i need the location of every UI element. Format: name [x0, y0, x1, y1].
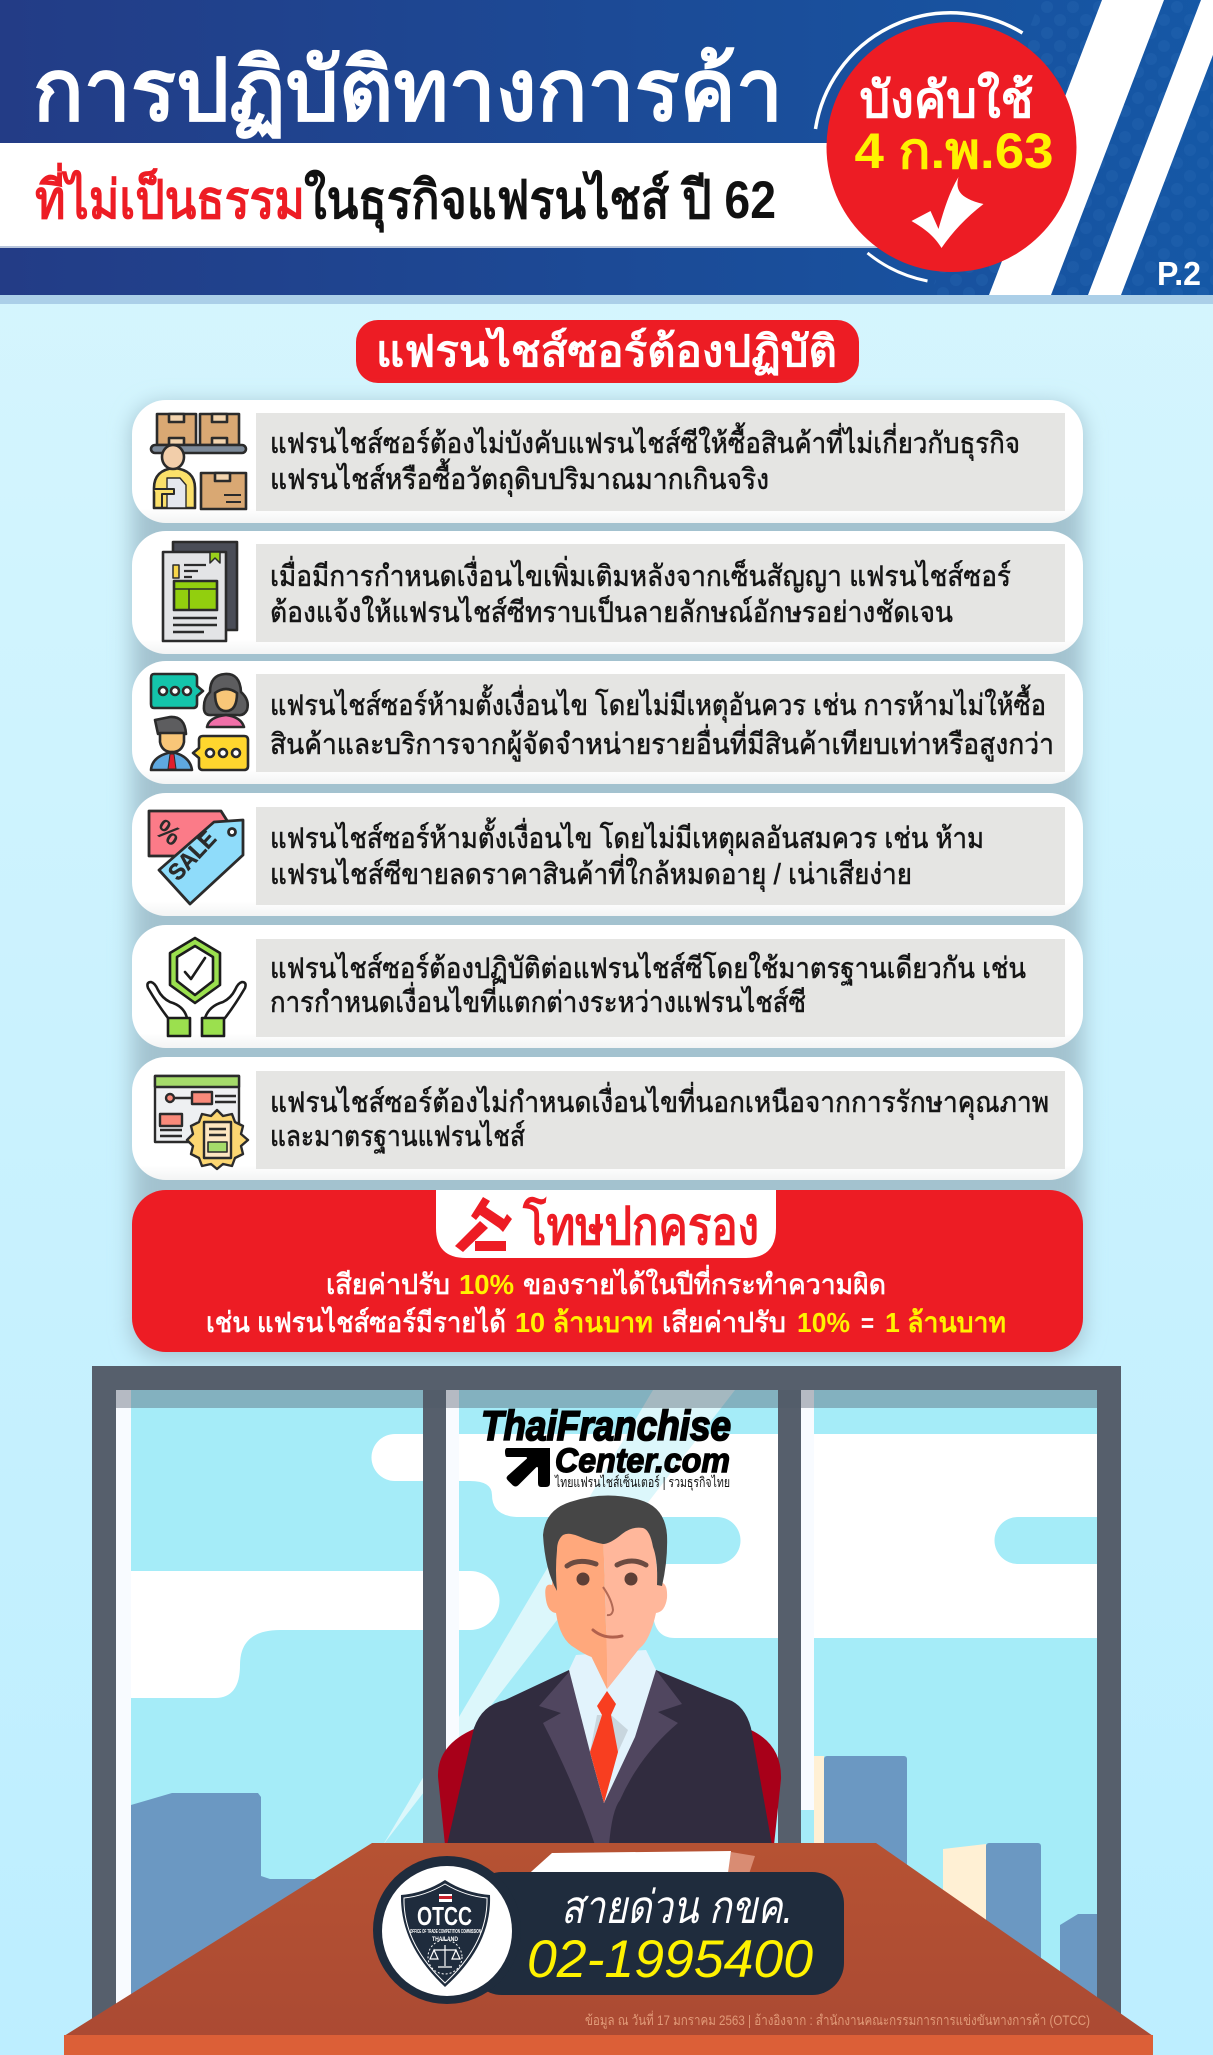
text: rule 6: และมาตรฐานแฟรนไชส์	[270, 1119, 525, 1154]
text: rule 1: แฟรนไชส์หรือซื้อวัตถุดิบปริมาณมากเกินจริง	[270, 458, 769, 497]
penalty line 2: =	[861, 1307, 874, 1338]
panel: rule 2	[132, 531, 1083, 654]
icon: warehouse worker	[151, 414, 246, 509]
lapels	[539, 1670, 682, 1845]
suit	[447, 1670, 772, 1845]
penalty line 2	[206, 1307, 1006, 1338]
penalty line 2: 1 ล้านบาท	[885, 1307, 1006, 1338]
text: rule 3: แฟรนไชส์ซอร์ห้ามตั้งเงื่อนไข โดยไม่มีเหตุอันควร เช่น การห้ามไม่ให้ซื้อ	[270, 684, 1046, 723]
badge: effective date: บังคับใช้	[860, 71, 1034, 128]
icon: check mark	[912, 177, 984, 248]
icon: gavel	[455, 1197, 512, 1252]
buildings	[131, 1756, 1097, 1997]
penalty heading: โทษปกครอง	[522, 1195, 759, 1256]
icon: logo arrow	[504, 1447, 551, 1488]
logo: ThaiFranchise Center: Center.com	[555, 1442, 730, 1480]
hotline label: สายด่วน กขค.	[561, 1881, 793, 1933]
panel: administrative penalty	[132, 1190, 1083, 1352]
reflection	[383, 1390, 735, 1845]
panel: rule 5	[132, 925, 1083, 1048]
logo: OTCC shield: THAILAND	[432, 1936, 458, 1943]
shirt and tie	[569, 1650, 656, 1803]
hotline badge	[373, 1856, 844, 2004]
logo: OTCC shield: OFFICE OF TRADE COMPETITION COMMISSION	[410, 1929, 481, 1935]
text: rule 4	[270, 817, 984, 892]
penalty line 2: 10%	[797, 1307, 850, 1338]
text: rule 2	[270, 556, 1011, 629]
text: rule 3: สินค้าและบริการจากผู้จัดจำหน่ายรายอื่นที่มีสินค้าเทียบเท่าหรือสูงกว่า	[270, 724, 1054, 762]
subtitle strip	[0, 143, 880, 248]
penalty line 1: ของรายได้ในปีที่กระทำความผิด	[523, 1265, 886, 1300]
penalty line 2: 10 ล้านบาท	[515, 1307, 653, 1338]
window frame	[92, 1366, 1121, 2036]
text: rule 6: แฟรนไชส์ซอร์ต้องไม่กำหนดเงื่อนไขที่นอกเหนือจากการรักษาคุณภาพ	[270, 1082, 1049, 1120]
illustration: businessman	[438, 1495, 781, 1845]
text: rule 2: เมื่อมีการกำหนดเงื่อนไขเพิ่มเติมหลังจากเซ็นสัญญา แฟรนไชส์ซอร์	[270, 556, 1011, 593]
panel: rule 6	[132, 1057, 1083, 1180]
badge: effective date: 4 ก.พ.63	[854, 123, 1054, 179]
panel: rule 3	[132, 661, 1083, 784]
icon: sale tags: %	[150, 813, 187, 852]
text: rule 4: แฟรนไชส์ซีขายลดราคาสินค้าที่ใกล้หมดอายุ / เน่าเสียง่าย	[270, 854, 912, 892]
text: rule 6	[270, 1082, 1049, 1154]
text: rule 5	[270, 951, 1026, 1019]
text: rule 5: การกำหนดเงื่อนไขที่แตกต่างระหว่างแฟรนไชส์ซี	[270, 982, 806, 1019]
paper on table	[725, 1852, 755, 1880]
section heading pill: แฟรนไชส์ซอร์ต้องปฏิบัติ	[376, 326, 837, 376]
penalty line 2: เสียค่าปรับ	[662, 1307, 786, 1338]
source note: ข้อมูล ณ วันที่ 17 มกราคม 2563 | อ้างอิงจาก : สำนักงานคณะกรรมการการแข่งขันทางการค้า (OTCC)	[585, 2011, 1090, 2029]
icon: people talking	[151, 674, 248, 770]
header banner	[0, 0, 1213, 295]
icon: contract document	[163, 542, 237, 641]
clouds	[131, 1434, 1097, 1698]
section heading pill	[356, 320, 859, 383]
penalty line 1	[326, 1265, 886, 1300]
text: rule 4: แฟรนไชส์ซอร์ห้ามตั้งเงื่อนไข โดยไม่มีเหตุผลอันสมควร เช่น ห้าม	[270, 817, 984, 856]
panel: rule 1	[132, 400, 1083, 523]
icon: quality standard	[155, 1076, 248, 1169]
icon: shield in hands	[147, 938, 246, 1036]
logo: ThaiFranchise Center: ไทยแฟรนไชส์เซ็นเตอร์ | รวมธุรกิจไทย	[554, 1473, 730, 1491]
title: การปฏิบัติทางการค้า	[33, 43, 783, 140]
table	[64, 1843, 1153, 2055]
logo: OTCC shield: OTCC	[417, 1901, 472, 1931]
logo: ThaiFranchise Center: ThaiFranchise	[481, 1402, 731, 1449]
badge: effective date	[816, 13, 1076, 281]
subtitle strip: ในธุรกิจแฟรนไชส์ ปี 62	[304, 169, 776, 233]
text: rule 5: แฟรนไชส์ซอร์ต้องปฏิบัติต่อแฟรนไชส์ซีโดยใช้มาตรฐานเดียวกัน เช่น	[270, 951, 1026, 986]
subtitle strip: ที่ไม่เป็นธรรม	[35, 162, 305, 230]
penalty line 2: เช่น แฟรนไชส์ซอร์มีรายได้	[206, 1307, 506, 1338]
header lower band	[0, 295, 1213, 304]
penalty tab	[436, 1190, 776, 1258]
penalty line 1: เสียค่าปรับ	[326, 1269, 450, 1300]
icon: sale tags	[149, 811, 243, 904]
chair	[438, 1729, 781, 1845]
panel: rule 4	[132, 793, 1083, 916]
text: rule 1	[270, 422, 1020, 497]
text: rule 3	[270, 684, 1054, 762]
logo: ThaiFranchise Center	[481, 1402, 731, 1491]
penalty line 1: 10%	[459, 1269, 514, 1300]
logo: OTCC shield	[401, 1880, 490, 1987]
page number: P.2	[1157, 255, 1201, 292]
icon: sale tags: SALE	[163, 825, 221, 885]
head	[543, 1495, 667, 1689]
window scene	[92, 1366, 1121, 2050]
text: rule 2: ต้องแจ้งให้แฟรนไชส์ซีทราบเป็นลายลักษณ์อักษรอย่างชัดเจน	[270, 594, 953, 629]
hotline number: 02-1995400	[527, 1930, 814, 1989]
text: rule 1: แฟรนไชส์ซอร์ต้องไม่บังคับแฟรนไชส์ซีให้ซื้อสินค้าที่ไม่เกี่ยวกับธุรกิจ	[270, 422, 1020, 461]
